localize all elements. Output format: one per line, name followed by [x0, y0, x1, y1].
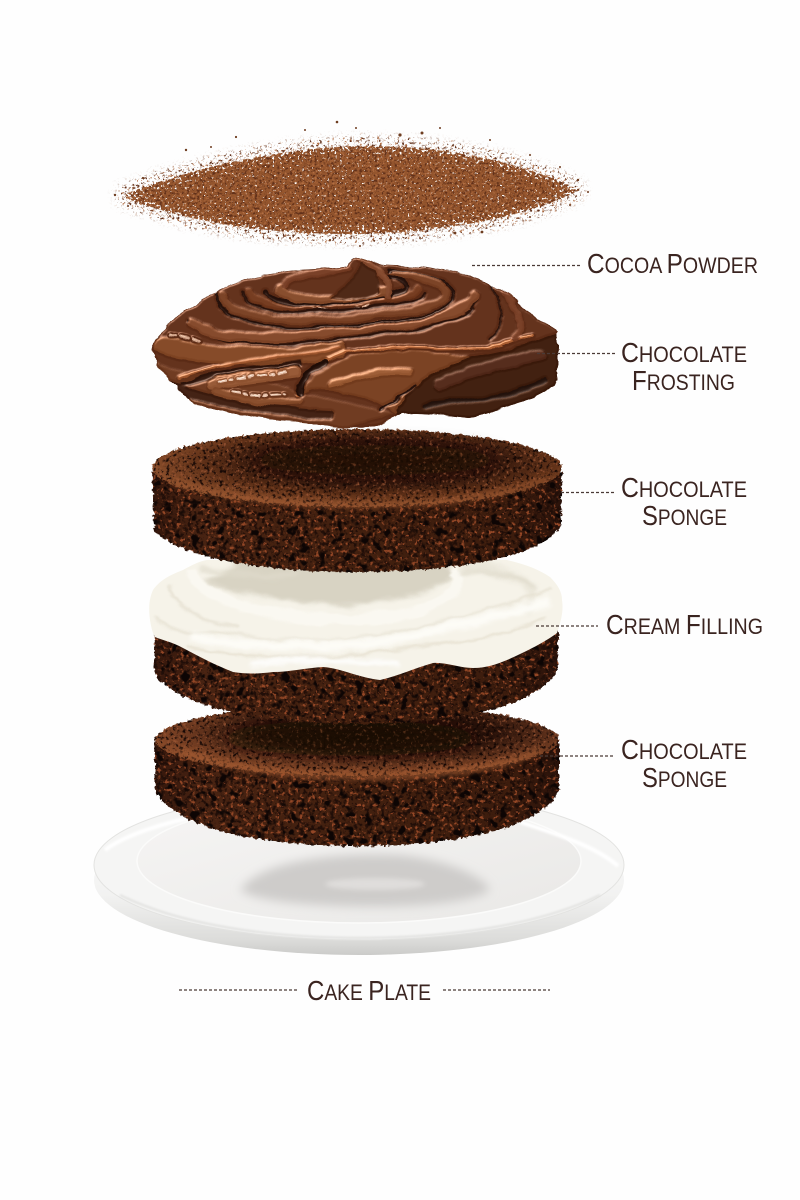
- bottom chocolate sponge: [155, 704, 559, 846]
- frosting lower body: [156, 361, 394, 429]
- chocolate frosting: [152, 258, 560, 429]
- label: chocolate sponge bottom: [540, 734, 747, 793]
- frosting base: [152, 258, 560, 429]
- lower sponge under cream: [154, 630, 558, 724]
- label: chocolate sponge bottom: SPONGE: [642, 762, 727, 793]
- label: chocolate sponge bottom: CHOCOLATE: [621, 734, 747, 765]
- cream filling: [149, 558, 563, 680]
- cocoa powder layer: [114, 121, 589, 247]
- label: cream filling: CREAM FILLING: [606, 609, 763, 640]
- cake plate: [94, 790, 624, 955]
- label: chocolate sponge top: CHOCOLATE: [621, 472, 747, 503]
- label: cocoa powder: COCOA POWDER: [587, 248, 758, 279]
- frosting fold crease: [297, 336, 532, 394]
- label: cake plate: CAKE PLATE: [307, 975, 431, 1006]
- label: chocolate frosting: [537, 337, 747, 396]
- cream shading: [155, 558, 553, 664]
- frosting specular patches: [218, 372, 285, 395]
- label: chocolate sponge top: SPONGE: [642, 500, 727, 531]
- label: chocolate sponge top: [561, 472, 747, 531]
- label: chocolate frosting: FROSTING: [632, 365, 735, 396]
- label: chocolate frosting: CHOCOLATE: [621, 337, 747, 368]
- top chocolate sponge: [152, 429, 562, 572]
- plate shadow: [240, 854, 490, 907]
- frosting spiral rings: [188, 297, 477, 344]
- frosting left bands: [163, 345, 337, 356]
